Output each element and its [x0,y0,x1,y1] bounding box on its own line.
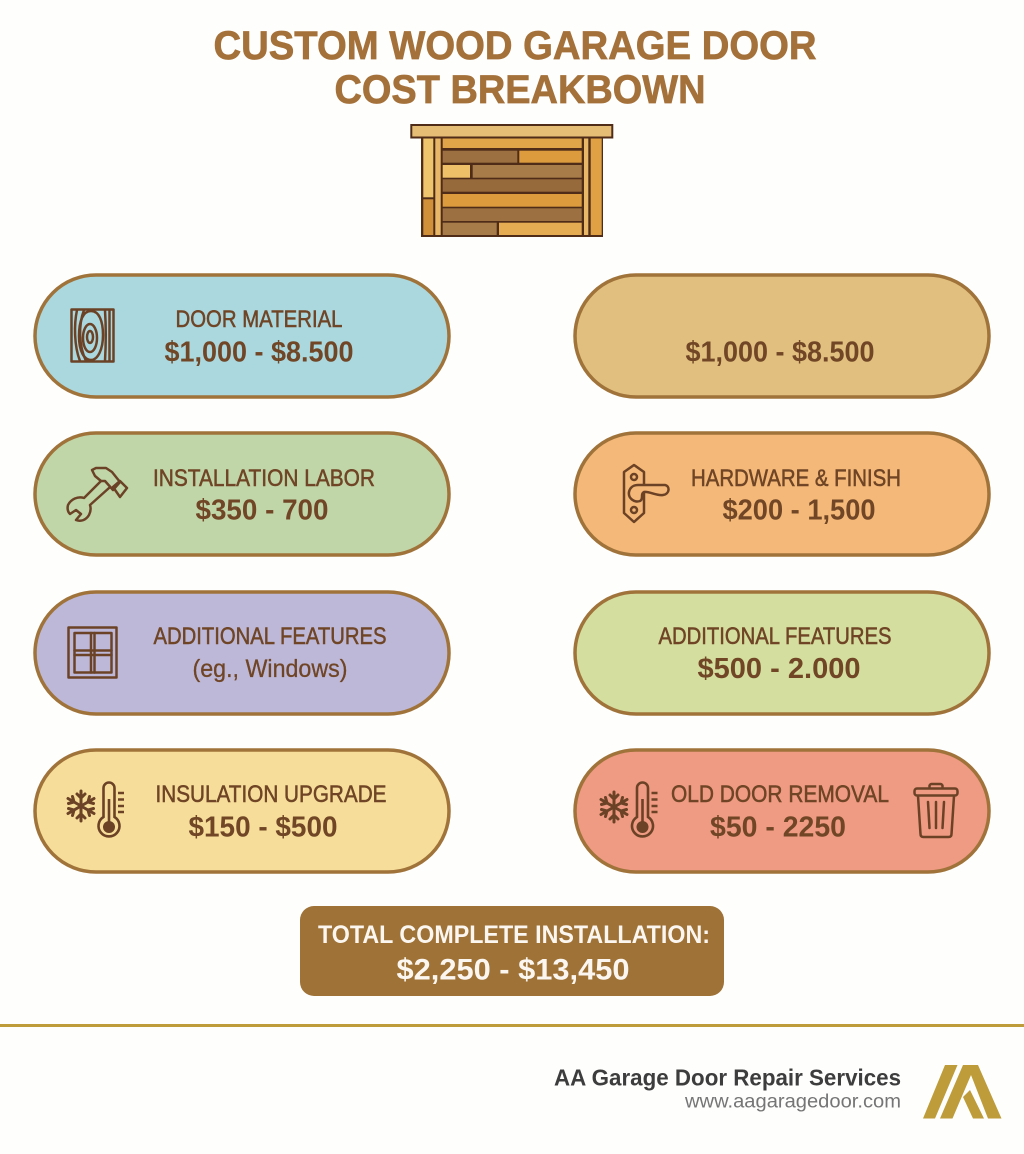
title [214,24,817,112]
panel: additional features cost [575,592,989,714]
panel: installation labor: $350 - 700 [196,494,328,526]
icon: trash can [914,784,958,837]
icon: wood grain [72,310,114,362]
panel: installation labor: INSTALLATION LABOR [153,465,375,492]
icon: window [68,628,116,678]
panel: additional features windows [35,592,449,714]
panel: installation labor [35,433,449,555]
title: CUSTOM WOOD GARAGE DOOR [214,24,817,68]
panel: door material: $1,000 - $8.500 [164,336,354,368]
panel: additional features windows: ADDITIONAL FEATURES [154,623,386,650]
icon: snowflake and thermometer [601,782,658,836]
panel: additional features windows: (eg., Windows) [192,655,348,683]
panel: old door removal: $50 - 2250 [710,812,846,844]
icon: wooden garage door [411,125,612,237]
icon: snowflake and thermometer [68,782,124,836]
panel: hardware and finish: HARDWARE & FINISH [691,465,901,492]
logo [923,1065,1002,1118]
panel: total installation [300,906,724,996]
footer: company name [554,1064,901,1112]
panel: hardware and finish [575,433,989,555]
icon: door handle [624,465,669,522]
panel: door material: DOOR MATERIAL [176,306,342,333]
panel: insulation upgrade [35,750,449,872]
footer: company name: www.aagaragedoor.com [684,1092,901,1112]
panel: insulation upgrade: INSULATION UPGRADE [156,781,386,808]
footer: company name: AA Garage Door Repair Services [554,1064,901,1090]
title: COST BREAKBOWN [334,68,706,112]
panel: old door removal: OLD DOOR REMOVAL [671,781,889,808]
panel: additional features cost: ADDITIONAL FEATURES [658,623,892,650]
panel: total installation: TOTAL COMPLETE INSTALLATION: [318,921,710,949]
panel: blank cost [575,275,989,397]
panel: door material [35,275,449,397]
icon: hammer and wrench [68,468,127,521]
panel: old door removal [575,750,989,872]
panel: hardware and finish: $200 - 1,500 [722,494,876,526]
panel: insulation upgrade: $150 - $500 [188,812,338,844]
panel: blank cost: $1,000 - $8.500 [686,336,874,368]
panel: additional features cost: $500 - 2.000 [698,653,860,685]
panel: total installation: $2,250 - $13,450 [396,954,630,986]
